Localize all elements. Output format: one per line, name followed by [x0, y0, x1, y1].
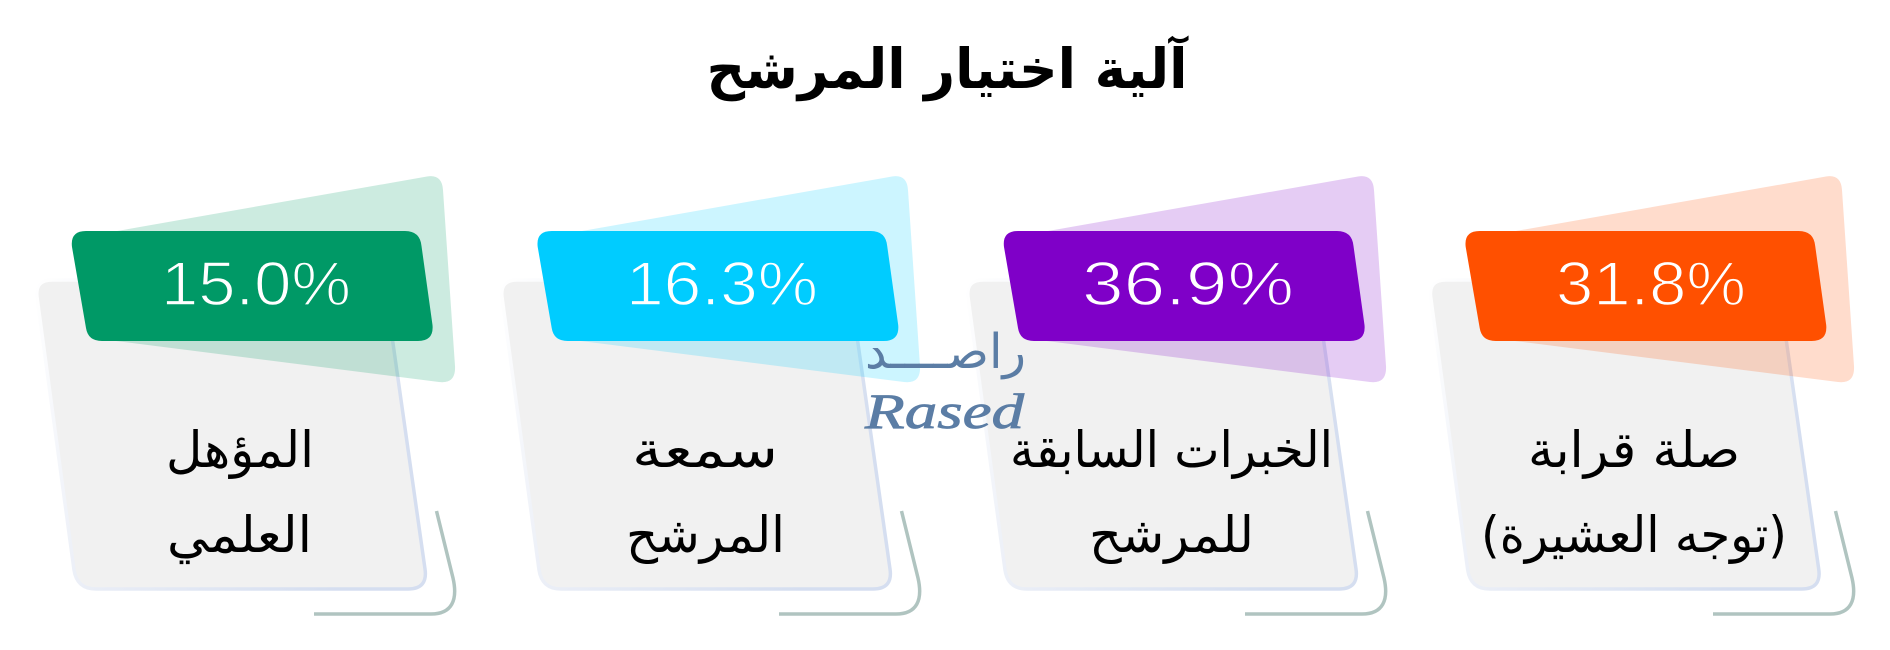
pale accent shape: [1031, 176, 1386, 382]
panel: candidate reputation 16.3%: [502, 176, 920, 614]
label: [1481, 421, 1787, 564]
percentage value: 36.9%: [1082, 250, 1294, 319]
watermark latin: Rased: [864, 383, 1025, 439]
percentage value: 31.8%: [1556, 250, 1746, 319]
label: العلمي: [167, 506, 312, 564]
card background: [1430, 280, 1819, 589]
card background: [968, 280, 1356, 589]
panel: kinship 31.8%: [1430, 176, 1854, 614]
percentage value: 16.3%: [626, 250, 818, 319]
label: المؤهل: [166, 421, 314, 479]
panel: previous experience 36.9%: [968, 176, 1386, 614]
pale accent shape: [100, 176, 455, 382]
percentage bar: [1004, 231, 1365, 341]
percentage bar: [72, 231, 433, 341]
label: سمعة: [632, 421, 778, 479]
percentage bar: [1465, 231, 1826, 341]
label: [166, 421, 314, 564]
card background: [502, 280, 890, 589]
label: المرشح: [626, 506, 785, 565]
corner bracket: [314, 511, 455, 614]
pale accent shape: [1499, 176, 1854, 382]
corner bracket: [779, 511, 920, 614]
corner bracket: [1713, 511, 1854, 614]
percentage bar: [537, 231, 898, 341]
label: [626, 421, 785, 565]
label: (توجه العشيرة): [1481, 506, 1787, 564]
label: للمرشح: [1089, 506, 1254, 565]
corner bracket: [1245, 511, 1386, 614]
label: الخبرات السابقة: [1010, 421, 1333, 479]
title: آلية اختيار المرشح: [706, 35, 1189, 101]
label: [1010, 421, 1333, 565]
pale accent shape: [565, 176, 920, 382]
watermark: Rased logo: [864, 324, 1026, 439]
percentage value: 15.0%: [161, 250, 351, 319]
card background: [37, 280, 425, 589]
watermark arabic: راصــــد: [865, 324, 1026, 380]
panel: academic qualification 15.0%: [37, 176, 455, 614]
label: صلة قرابة: [1528, 421, 1740, 479]
